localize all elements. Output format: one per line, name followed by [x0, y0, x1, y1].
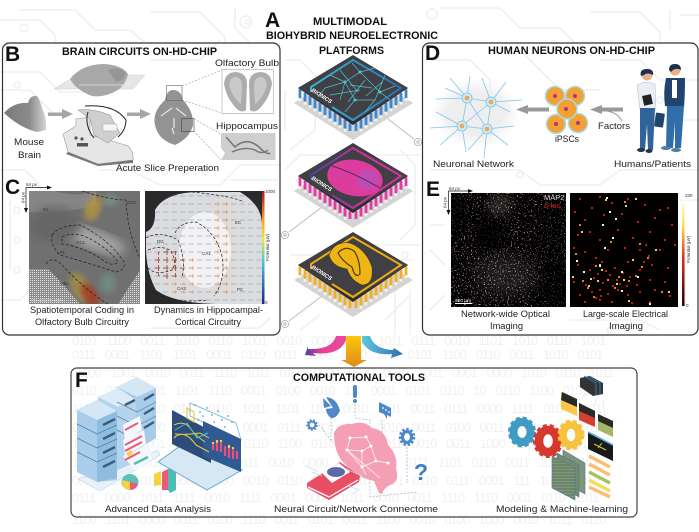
- background binary digits: 1101 0011 0010 0100 0110 1011 1101 1100 0010 1101 0011 0111 0000 1111 0100 1011: [72, 401, 602, 416]
- colour bar: potential: [682, 193, 693, 308]
- axis: 64 px: [442, 186, 473, 215]
- background binary digits: [72, 333, 614, 527]
- heading: human neurons: HUMAN NEURONS ON-HD-CHIP: [488, 45, 655, 57]
- heading: multimodal biohybrid neuroelectronic platforms: BIOHYBRID NEUROELECTRONIC: [266, 30, 438, 42]
- image: olfactory bulb activity map: OBL: [60, 281, 70, 286]
- caption: optical imaging: Network-wide Optical: [461, 308, 550, 319]
- background binary digits: 1010 0011 1001 0100 0010 0110 1100 0110 1011 1011 0010 0011 1000 0100 0111 1001: [72, 436, 607, 451]
- caption: electrical imaging: [583, 308, 668, 331]
- caption: mouse brain: Brain: [18, 149, 41, 160]
- icon: vibratome slicer: [63, 106, 133, 166]
- axis: 64 px: 64 px: [449, 186, 461, 191]
- axis: 64 px: 64 px: [442, 196, 448, 208]
- icon: stacked strips: [589, 456, 610, 497]
- image: hippocampal-cortical activity map: [145, 191, 262, 304]
- image: optical imaging MAP2 c-fos: [451, 193, 566, 307]
- caption: neuronal network: Neuronal Network: [433, 158, 514, 169]
- caption: acute slice preparation: Acute Slice Preperation: [116, 162, 219, 173]
- icon: exclamation mark: [353, 385, 357, 403]
- image: olfactory bulb activity map: HD-CMOS-MEA: [31, 298, 64, 303]
- dashed zoom lines: [182, 70, 222, 160]
- caption: modeling and machine learning: Modeling & Machine-learning: [496, 503, 628, 514]
- caption: hippocampal-cortical dynamics: Dynamics in Hippocampal-: [154, 304, 263, 315]
- background binary digits: 0110 0101 0001 1101 1110 0001 0100 0010 111 0001 0101 0110 10 0110 1100 0101: [72, 383, 588, 398]
- caption: spatiotemporal coding: [30, 304, 134, 327]
- label B: B: [5, 43, 20, 66]
- axis: 64 px: [20, 182, 52, 213]
- background binary digits: 0111 0001 1101 1101 0001 0110 0111 1000 0010 1111 0101 1100 0110 0011 1010 0101: [72, 347, 603, 362]
- colour bar: potential: 0: [265, 300, 268, 305]
- caption: iPSCs: iPSCs: [555, 133, 579, 144]
- background binary digits: 1100 1101 0000 0011 0100 1110 0011 0101 0011 1100 0010 0100 1000 0010 1011 0110: [72, 512, 606, 527]
- icon: brain on glass slide: [54, 64, 145, 96]
- background binary digits: 0101 1100 0011 1010 0110 1001 0010 0001 1110 1011 0111 0010 1101 1010 0110 1001: [72, 333, 606, 348]
- label E: E: [426, 178, 440, 201]
- image: olfactory bulb slice: [222, 70, 274, 114]
- caption: optical imaging: Imaging: [490, 320, 523, 331]
- heading: brain circuits: BRAIN CIRCUITS ON-HD-CHIP: [62, 46, 217, 58]
- colour bar: potential: [262, 189, 276, 305]
- icon: server racks: [77, 377, 160, 491]
- background binary digits: 0111 0000 1011 1111 0010 1111 0001 0000 1011 0010 0011 1110 1110 0001 0110 1011: [72, 490, 599, 505]
- label D: D: [425, 42, 440, 65]
- caption: olfactory bulb: Olfactory Bulb: [215, 57, 279, 68]
- caption: optical imaging: [461, 308, 550, 331]
- arrow: iPSCs to neurons: [516, 105, 549, 114]
- icon: mouse head: [4, 96, 46, 132]
- image: electrical imaging spikes: [570, 193, 678, 307]
- chip 1: neuron network on blue chip: BIONICS: [310, 88, 333, 106]
- arrows: chips to computational tools: [305, 336, 403, 367]
- caption: humans/patients: Humans/Patients: [614, 158, 691, 169]
- heading: multimodal biohybrid neuroelectronic platforms: PLATFORMS: [319, 45, 384, 57]
- colour bar: potential: Potential (µV): [686, 235, 691, 263]
- caption: mouse brain: [14, 136, 44, 160]
- image: hippocampus slice: [221, 133, 276, 160]
- icon: pie chart blue: [323, 397, 340, 418]
- icon: gears: [510, 418, 583, 456]
- chip 3: hippocampal slice on gold chip: [294, 232, 413, 317]
- chip 2: brain on magenta chip: [294, 143, 413, 228]
- background binary digits: 1000 1001 0010 0011 1110 1011 0100 0000 0000 0010 1001 0001 0000 1010 0110 1011: [76, 365, 614, 380]
- caption: hippocampal-cortical dynamics: [154, 304, 263, 327]
- icon: chat bubble: [379, 402, 391, 419]
- icon: iPSC cells: [546, 86, 588, 134]
- icon: pie chart and bars: [122, 466, 176, 493]
- caption: factors: Factors: [598, 120, 630, 131]
- axis: 64 px: 64 px: [20, 191, 26, 203]
- label A: A: [265, 9, 280, 32]
- dashed guide lines: [319, 404, 418, 497]
- icon: pink brain network: [334, 423, 397, 494]
- image: olfactory bulb activity map: OCx: [127, 200, 137, 205]
- chip 3: hippocampal slice on gold chip: BIONICS: [310, 265, 333, 283]
- background binary digits: 0001 1100 0110 0001 1000 0010 0110 1101 0010 1101 0110 0111 0001 111 1001 0010: [72, 473, 600, 488]
- caption: mouse brain: Mouse: [14, 136, 44, 147]
- connector lines from chips to panels: [281, 119, 422, 328]
- background circuit pattern: [0, 8, 699, 335]
- chip 2: brain on magenta chip: BIONICS: [310, 176, 333, 194]
- icon: data cards: [561, 376, 613, 461]
- caption: neural circuit connectome: Neural Circuit/Network Connectome: [274, 503, 438, 514]
- heading: computational tools: COMPUTATIONAL TOOLS: [293, 372, 425, 384]
- icon: small gear: [307, 420, 317, 430]
- icon: woman: [637, 69, 656, 153]
- heading: multimodal biohybrid neuroelectronic platforms: MULTIMODAL: [313, 16, 388, 28]
- image: hippocampal-cortical activity map: PC: [237, 287, 244, 292]
- heading: multimodal biohybrid neuroelectronic platforms: [266, 16, 438, 57]
- axis: 64 px: 64 px: [26, 182, 38, 187]
- caption: advanced data analysis: Advanced Data Analysis: [105, 503, 211, 514]
- colour bar: potential: 330: [685, 193, 693, 198]
- arrow: mouse to slicer: [48, 109, 73, 119]
- icon: man: [654, 64, 685, 152]
- icon: neural network layers: [552, 450, 585, 500]
- label C: C: [5, 176, 20, 199]
- icon: large gear: [400, 429, 414, 445]
- image: olfactory bulb activity map: PL: [60, 250, 66, 255]
- arrow: slicer to brain: [127, 109, 151, 119]
- icon: question mark: ?: [414, 459, 428, 485]
- caption: spatiotemporal coding: Olfactory Bulb Circuitry: [35, 316, 129, 327]
- image: optical imaging MAP2 c-fos: c-fos: [544, 201, 561, 210]
- icon: neuronal network: [430, 76, 522, 158]
- chip 1: neuron network on blue chip: [294, 55, 413, 140]
- arrow: patients to iPSCs: [590, 105, 623, 121]
- colour bar: potential: 0: [686, 303, 689, 308]
- image: hippocampal-cortical activity map: CA1: [202, 251, 211, 256]
- caption: electrical imaging: Large-scale Electrical: [583, 308, 668, 319]
- colour bar: potential: Potential (µV): [265, 233, 270, 261]
- caption: hippocampus: Hippocampus: [216, 120, 278, 131]
- icon: neuroscience book: [306, 462, 362, 500]
- colour bar: potential: 1000: [265, 189, 276, 194]
- image: hippocampal-cortical activity map: EC: [235, 220, 242, 225]
- image: olfactory bulb activity map: GL: [43, 207, 50, 212]
- panel: human neurons on HD-chip: [422, 42, 698, 335]
- image: optical imaging MAP2 c-fos: 300 µm: [455, 298, 471, 304]
- image: olfactory bulb activity map: [29, 191, 140, 310]
- image: hippocampal-cortical activity map: DG: [157, 239, 164, 244]
- icon: laptop with dashboards: [158, 403, 242, 490]
- panel: brain circuits on HD-chip: [2, 43, 280, 335]
- caption: electrical imaging: Imaging: [609, 320, 643, 331]
- image: olfactory bulb activity map: GCL: [76, 240, 86, 245]
- label F: F: [75, 369, 88, 392]
- image: hippocampal-cortical activity map: CA3: [177, 286, 186, 291]
- background binary digits: 0001 1100 0100 1011 0100 0001 0111 0001 0111 0010 0011 0100 0011 1000 1101 0110: [72, 420, 606, 435]
- panel: computational tools: [71, 368, 637, 517]
- icon: brain top view: [154, 86, 194, 145]
- caption: spatiotemporal coding: Spatiotemporal Coding in: [30, 304, 134, 315]
- caption: hippocampal-cortical dynamics: Cortical Circuitry: [175, 316, 241, 327]
- background binary digits: 1110 1010 0011 101 0100 0111 0010 0000 0100 0110 0111 1101 0110 0011 1010 0101: [72, 455, 599, 470]
- image: optical imaging MAP2 c-fos: MAP2: [544, 193, 564, 202]
